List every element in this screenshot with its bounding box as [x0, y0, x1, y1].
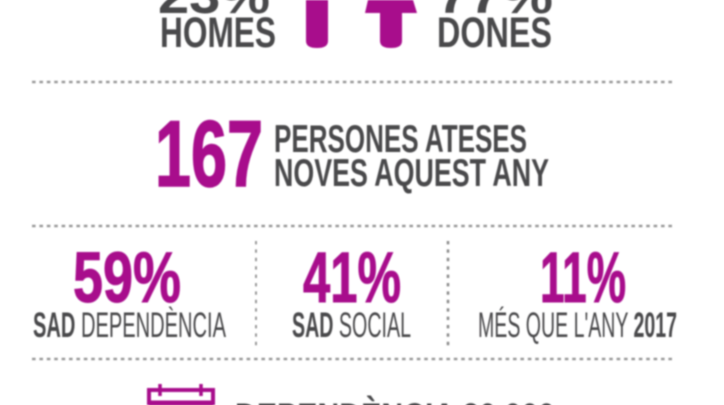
- new clients figure: 167: [155, 101, 263, 206]
- stat: SAD dependencia: [33, 239, 226, 345]
- icon: man: [306, 0, 328, 48]
- new clients figure: PERSONES ATESES: [274, 118, 527, 161]
- stat: SAD dependencia: 59%: [73, 239, 181, 318]
- stat: SAD dependencia: SAD DEPENDÈNCIA: [33, 306, 226, 345]
- icon: calendar: [149, 384, 213, 405]
- stat: SAD social: 41%: [303, 239, 401, 318]
- stat: increase over 2017: 11%: [540, 239, 626, 318]
- women percentage and label: DONES: [437, 9, 552, 57]
- new clients figure: NOVES AQUEST ANY: [274, 152, 549, 195]
- women percentage and label: [437, 0, 553, 57]
- stat: SAD social: [292, 239, 411, 345]
- new clients figure: [155, 101, 549, 206]
- icon: woman: [365, 0, 417, 48]
- stat: SAD social: SAD SOCIAL: [292, 306, 411, 345]
- men percentage and label: [158, 0, 276, 57]
- men percentage and label: HOMES: [160, 9, 276, 57]
- stat: increase over 2017: [478, 239, 677, 345]
